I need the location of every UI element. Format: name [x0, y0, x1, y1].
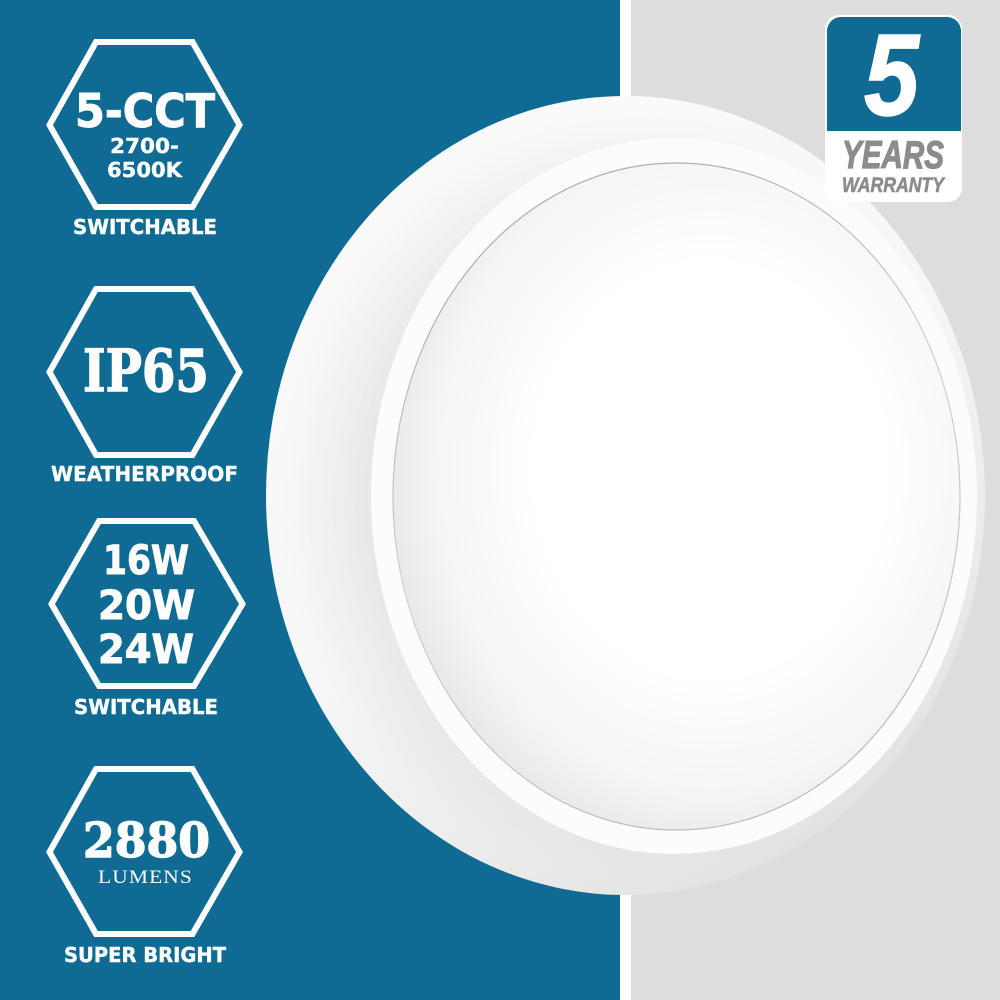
- badge number: 5: [864, 10, 920, 140]
- colour temperature line 1: 2700-: [110, 134, 179, 158]
- feature: IP65: [50, 289, 240, 486]
- feature: wattage: [52, 521, 242, 719]
- product: round bulkhead light: [266, 96, 985, 895]
- lamp body: [266, 96, 985, 895]
- wattage 16W: 16W: [103, 538, 189, 584]
- lamp body shading: [266, 96, 985, 895]
- badge warranty: WARRANTY: [842, 174, 946, 197]
- hexagon outline: [52, 521, 242, 686]
- lamp diffuser lens: [393, 163, 960, 830]
- feature: 5-CCT: [50, 42, 240, 239]
- weatherproof caption: WEATHERPROOF: [51, 462, 238, 486]
- switchable caption: SWITCHABLE: [74, 695, 218, 719]
- badge blue header: [827, 17, 961, 131]
- wattage 24W: 24W: [98, 627, 194, 673]
- panel: blue left side: [0, 0, 620, 1000]
- IP65 heading: IP65: [83, 337, 209, 405]
- switchable caption: SWITCHABLE: [73, 215, 217, 239]
- badge: 5 years warranty: [825, 10, 962, 202]
- 5-CCT heading: 5-CCT: [75, 84, 216, 138]
- lumens label: LUMENS: [98, 867, 193, 888]
- badge years: YEARS: [842, 134, 944, 177]
- super bright caption: SUPER BRIGHT: [64, 943, 226, 967]
- hexagon outline: [50, 289, 240, 455]
- badge card: [825, 15, 962, 202]
- 2880 heading: 2880: [83, 813, 210, 869]
- hexagon outline: [50, 769, 240, 934]
- colour temperature line 2: 6500K: [107, 158, 184, 182]
- hexagon outline: [50, 42, 240, 207]
- wattage 20W: 20W: [98, 583, 195, 629]
- lamp collar ring: [371, 138, 977, 854]
- white divider strip: [620, 0, 631, 1000]
- feature: lumens: [50, 769, 240, 967]
